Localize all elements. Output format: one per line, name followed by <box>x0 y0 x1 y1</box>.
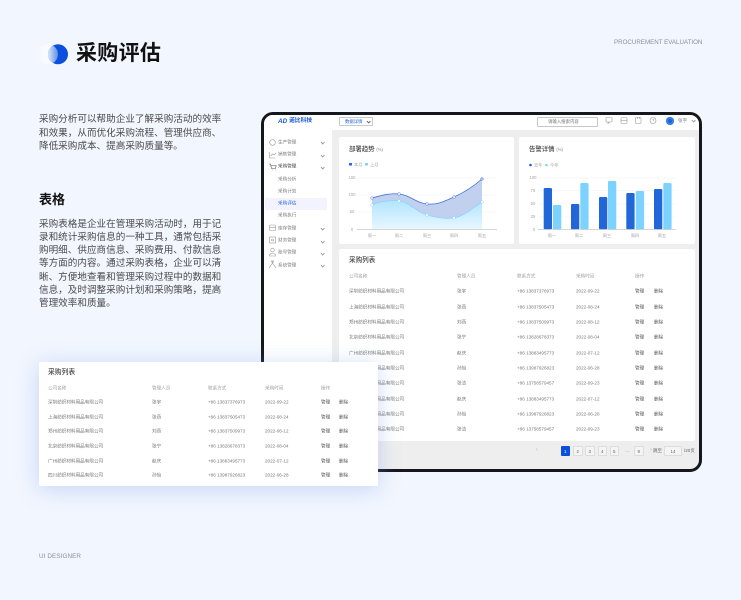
footer label: UI DESIGNER <box>39 553 81 560</box>
panel: purchase list: 2022-09-23 <box>576 427 600 432</box>
panel: trend area chart <box>339 137 514 244</box>
panel: purchase list: 张洁 <box>457 427 466 432</box>
panel: purchase list: 管理 <box>635 412 644 417</box>
area chart <box>349 161 497 230</box>
panel: floating purchase list card: 北京纺织材料用品有限公司 <box>48 444 103 449</box>
logo <box>278 116 312 125</box>
pagination: … <box>625 448 629 453</box>
area chart axis labels: 100 <box>348 192 356 197</box>
panel: floating purchase list card: 张燕 <box>152 414 161 419</box>
panel: floating purchase list card: 删除 <box>339 414 348 419</box>
bar chart axis labels: 周三 <box>603 232 611 237</box>
text: 财务管理 <box>278 238 296 243</box>
table header: 操作 <box>635 274 644 279</box>
table description text block: 管理效率和质量。 <box>39 298 116 309</box>
panel: floating purchase list card: 管理 <box>321 473 330 478</box>
panel: purchase list: +86 13837509973 <box>517 320 554 325</box>
panel: purchase list: 孙怡 <box>457 412 466 417</box>
pagination: 4 <box>601 449 603 454</box>
panel: purchase list: +86 13987926823 <box>517 412 554 417</box>
panel: purchase list: 删除 <box>654 320 663 325</box>
panel: purchase list: +86 13883495773 <box>517 350 554 355</box>
panel: floating purchase list card: 2022-08-12 <box>265 429 288 434</box>
panel: purchase list: 2022-08-24 <box>576 304 600 309</box>
pagination: 跳至 <box>653 448 662 453</box>
panel: floating purchase list card: 管理 <box>321 444 330 449</box>
panel: floating purchase list card: 2022-06-28 <box>265 473 288 478</box>
panel: floating purchase list card: +86 13987926823 <box>208 473 245 478</box>
card table rows: 深圳纺织材料用品有限公司 <box>48 400 103 405</box>
user name: 张宇 <box>678 118 687 123</box>
pagination: /20页 <box>684 448 695 453</box>
panel: purchase list: 2022-08-04 <box>576 335 600 340</box>
panel: floating purchase list card: 删除 <box>339 458 348 463</box>
panel: purchase list: 天津纺织材料用品有限公司 <box>349 427 404 432</box>
table rows: 管理 <box>635 289 644 294</box>
text: 账号管理 <box>278 250 296 255</box>
title: 采购评估 <box>76 42 161 65</box>
intro text block <box>39 114 221 152</box>
panel: floating purchase list card: 上海纺织材料用品有限公司 <box>48 414 103 419</box>
text: 采购计划 <box>278 188 296 193</box>
panel: purchase list: 删除 <box>654 366 663 371</box>
dropdown button <box>339 117 373 126</box>
panel: purchase list: 删除 <box>654 381 663 386</box>
search box: 请输入搜索内容 <box>548 119 579 124</box>
panel: purchase list: 删除 <box>654 396 663 401</box>
intro text block: 采购分析可以帮助企业了解采购活动的效率 <box>39 114 221 125</box>
panel: purchase list: 张洁 <box>457 381 466 386</box>
panel: floating purchase list card: 管理 <box>321 414 330 419</box>
area chart axis labels: 周三 <box>423 232 431 237</box>
panel: purchase list: 上海纺织材料用品有限公司 <box>349 304 404 309</box>
panel: purchase list <box>339 249 695 441</box>
sidebar menu <box>265 198 327 210</box>
panel: floating purchase list card: 管理 <box>321 429 330 434</box>
panel: floating purchase list card: 四川纺织材料用品有限公司 <box>48 473 103 478</box>
table description text block: 等方面的内容。通过采购表格，企业可以清 <box>39 258 221 269</box>
sidebar background <box>264 115 332 469</box>
table rows: 深圳纺织材料用品有限公司 <box>349 289 404 294</box>
table description text block: 信息，及时调整采购计划和采购策略，提高 <box>39 285 221 296</box>
table header: 联系方式 <box>517 274 535 279</box>
panel: purchase list: +86 13987926823 <box>517 366 554 371</box>
panel: floating purchase list card: +86 13828678373 <box>208 444 245 449</box>
area chart axis labels: 周一 <box>368 232 376 237</box>
panel: purchase list: 管理 <box>635 335 644 340</box>
card table header <box>48 385 330 391</box>
bar chart axis labels: 25 <box>531 214 535 219</box>
panel: purchase list: 赵庆 <box>457 350 466 355</box>
card table rows <box>48 399 348 405</box>
search box <box>537 117 598 126</box>
panel: purchase list: 删除 <box>654 412 663 417</box>
table rows <box>349 288 663 294</box>
pagination: 9 <box>638 449 640 454</box>
card table rows: 张宇 <box>152 400 161 405</box>
panel: purchase list: 2022-06-28 <box>576 366 600 371</box>
area chart axis labels: 50 <box>350 209 354 214</box>
table header <box>349 273 644 279</box>
card table header: 操作 <box>321 386 330 391</box>
panel: purchase list: 刘燕 <box>457 320 466 325</box>
panel: purchase list: 2022-09-23 <box>576 381 600 386</box>
bar chart axis labels: 75 <box>531 187 535 192</box>
logo: AD <box>278 118 287 125</box>
pagination: 3 <box>589 449 591 454</box>
pagination: 1 <box>564 449 566 454</box>
panel: floating purchase list card: +86 13837509973 <box>208 429 245 434</box>
panel: purchase list: 2022-07-12 <box>576 350 600 355</box>
pagination: 5 <box>613 449 615 454</box>
pagination: › <box>650 447 652 453</box>
panel: purchase list: +86 13837505473 <box>517 304 554 309</box>
bar chart axis labels: 周四 <box>631 232 639 237</box>
panel: purchase list: 2022-08-12 <box>576 320 600 325</box>
bar chart axis labels: 周五 <box>658 232 666 237</box>
panel: floating purchase list card <box>39 362 378 486</box>
panel: floating purchase list card: 删除 <box>339 473 348 478</box>
area chart axis labels: 150 <box>348 175 356 180</box>
area chart axis labels: 周五 <box>478 232 486 237</box>
bar chart <box>529 162 676 230</box>
card table header: 管理人员 <box>152 386 170 391</box>
panel: purchase list: 管理 <box>635 366 644 371</box>
panel: purchase list: 四川纺织材料用品有限公司 <box>349 366 404 371</box>
panel: purchase list: 删除 <box>654 304 663 309</box>
area chart axis labels <box>348 175 486 238</box>
panel: purchase list: 管理 <box>635 320 644 325</box>
panel: purchase list: 广州纺织材料用品有限公司 <box>349 350 404 355</box>
text: 销售管理 <box>278 152 296 157</box>
bar chart axis labels <box>530 175 666 238</box>
panel: purchase list: 删除 <box>654 427 663 432</box>
icon: title circles <box>48 44 68 64</box>
bar chart: 今年 <box>550 162 558 168</box>
panel: purchase list: +86 13758579457 <box>517 427 554 432</box>
table header: 管理人员 <box>457 274 475 279</box>
panel: purchase list: 管理 <box>635 304 644 309</box>
bar chart axis labels: 100 <box>530 175 536 180</box>
intro text block: 和效果，从而优化采购流程、管理供应商、 <box>39 128 221 138</box>
panel: purchase list: 删除 <box>654 335 663 340</box>
table rows: 2022-09-22 <box>576 289 600 294</box>
panel: alarm bar chart <box>519 137 695 244</box>
panel: floating purchase list card: 张宁 <box>152 444 161 449</box>
area chart axis labels: 周二 <box>395 232 403 237</box>
text: 采购评估 <box>278 201 296 206</box>
panel: purchase list: 北京纺织材料用品有限公司 <box>349 335 404 340</box>
avatar <box>666 117 674 125</box>
pagination: 2 <box>577 449 579 454</box>
bar chart heading: 告警详情 (%) <box>529 146 563 152</box>
card heading: 采购列表 <box>48 368 75 376</box>
top bar <box>264 115 699 130</box>
pagination: 14 <box>671 449 675 454</box>
bar chart axis labels: 周二 <box>575 232 583 237</box>
panel: floating purchase list card: 2022-07-12 <box>265 458 288 463</box>
area chart axis labels: 周四 <box>450 232 458 237</box>
table description text block <box>39 218 221 309</box>
table rows: 张宇 <box>457 289 466 294</box>
text: 生产管理 <box>278 139 296 144</box>
selected menu item <box>265 198 327 210</box>
panel: purchase list: 天津纺织材料用品有限公司 <box>349 381 404 386</box>
area chart: 上月 <box>370 161 378 168</box>
panel: purchase list: 2022-07-12 <box>576 396 600 401</box>
area chart: 本月 <box>354 161 362 168</box>
panel: floating purchase list card: 2022-08-24 <box>265 414 288 419</box>
panel: purchase list: 2022-06-28 <box>576 412 600 417</box>
panel: floating purchase list card: 2022-08-04 <box>265 444 288 449</box>
panel: purchase list: 张宁 <box>457 335 466 340</box>
area chart axis labels: 0 <box>351 226 353 231</box>
panel: purchase list: +86 13883495773 <box>517 396 554 401</box>
intro text block: 降低采购成本、提高采购质量等。 <box>39 141 183 152</box>
table rows: 删除 <box>654 289 663 294</box>
panel: purchase list: 管理 <box>635 381 644 386</box>
card table header: 采购时间 <box>265 386 283 391</box>
panel: floating purchase list card: 广州纺织材料用品有限公司 <box>48 458 103 463</box>
heading: table: 表格 <box>39 192 65 207</box>
sidebar icons <box>268 139 276 268</box>
list heading: 采购列表 <box>349 256 375 264</box>
bar chart axis labels: 50 <box>531 201 535 206</box>
table description text block: 录和统计采购信息的一种工具，通常包括采 <box>39 232 221 243</box>
panel: purchase list: 赵庆 <box>457 396 466 401</box>
card table rows: 管理 <box>321 400 330 405</box>
card table rows: 2022-09-22 <box>265 400 288 405</box>
panel: floating purchase list card: +86 13837505473 <box>208 414 245 419</box>
panel: floating purchase list card: 孙怡 <box>152 473 161 478</box>
bar chart axis labels: 0 <box>533 226 535 231</box>
panel: purchase list: 张燕 <box>457 304 466 309</box>
card table rows: +86 13837376973 <box>208 400 245 405</box>
panel: purchase list: 管理 <box>635 427 644 432</box>
bar chart axis labels: 周一 <box>548 232 556 237</box>
table description text block: 采购表格是企业在管理采购活动时，用于记 <box>39 218 221 230</box>
bar chart: 去年 <box>534 162 542 168</box>
panel: purchase list: 删除 <box>654 350 663 355</box>
panel: floating purchase list card: 郑州纺织材料用品有限公司 <box>48 429 103 434</box>
english subtitle: PROCUREMENT EVALUATION <box>614 39 702 46</box>
panel: purchase list: 管理 <box>635 350 644 355</box>
panel: floating purchase list card: 删除 <box>339 429 348 434</box>
panel: floating purchase list card: 管理 <box>321 458 330 463</box>
dropdown button: 数据详情 <box>345 119 363 124</box>
table header: 采购时间 <box>576 274 594 279</box>
card table header: 公司名称 <box>48 386 66 391</box>
panel: purchase list: 孙怡 <box>457 366 466 371</box>
panel: floating purchase list card: +86 13883495773 <box>208 458 245 463</box>
panel: purchase list: 管理 <box>635 396 644 401</box>
panel: purchase list: 四川纺织材料用品有限公司 <box>349 412 404 417</box>
table description text block: 晰、方便地查看和管理采购过程中的数据和 <box>39 272 221 282</box>
toolbar icons <box>606 117 656 124</box>
panel: purchase list: +86 13758579457 <box>517 381 554 386</box>
card table rows: 删除 <box>339 400 348 405</box>
pagination: ‹ <box>536 446 538 452</box>
text: 采购执行 <box>278 213 296 218</box>
panel: floating purchase list card: 删除 <box>339 444 348 449</box>
panel: purchase list: 广州纺织材料用品有限公司 <box>349 396 404 401</box>
panel: purchase list: +86 13828678373 <box>517 335 554 340</box>
pagination <box>536 446 695 456</box>
text: 库存管理 <box>278 225 296 230</box>
card table header: 联系方式 <box>208 386 226 391</box>
table header: 公司名称 <box>349 274 367 279</box>
panel: purchase list: 郑州纺织材料用品有限公司 <box>349 320 404 325</box>
chart heading: 部署趋势 (%) <box>349 146 383 152</box>
logo: 诺比科技 <box>289 118 312 124</box>
text: 采购管理 <box>278 164 296 169</box>
panel: floating purchase list card: 赵庆 <box>152 458 161 463</box>
panel: floating purchase list card: 刘燕 <box>152 429 161 434</box>
device frame dashboard <box>261 112 702 472</box>
table rows: +86 13837376973 <box>517 289 554 294</box>
text: 采购分析 <box>278 176 296 181</box>
table description text block: 购明细、供应商信息、采购费用、付款信息 <box>39 245 221 256</box>
text: 系统管理 <box>278 262 296 267</box>
